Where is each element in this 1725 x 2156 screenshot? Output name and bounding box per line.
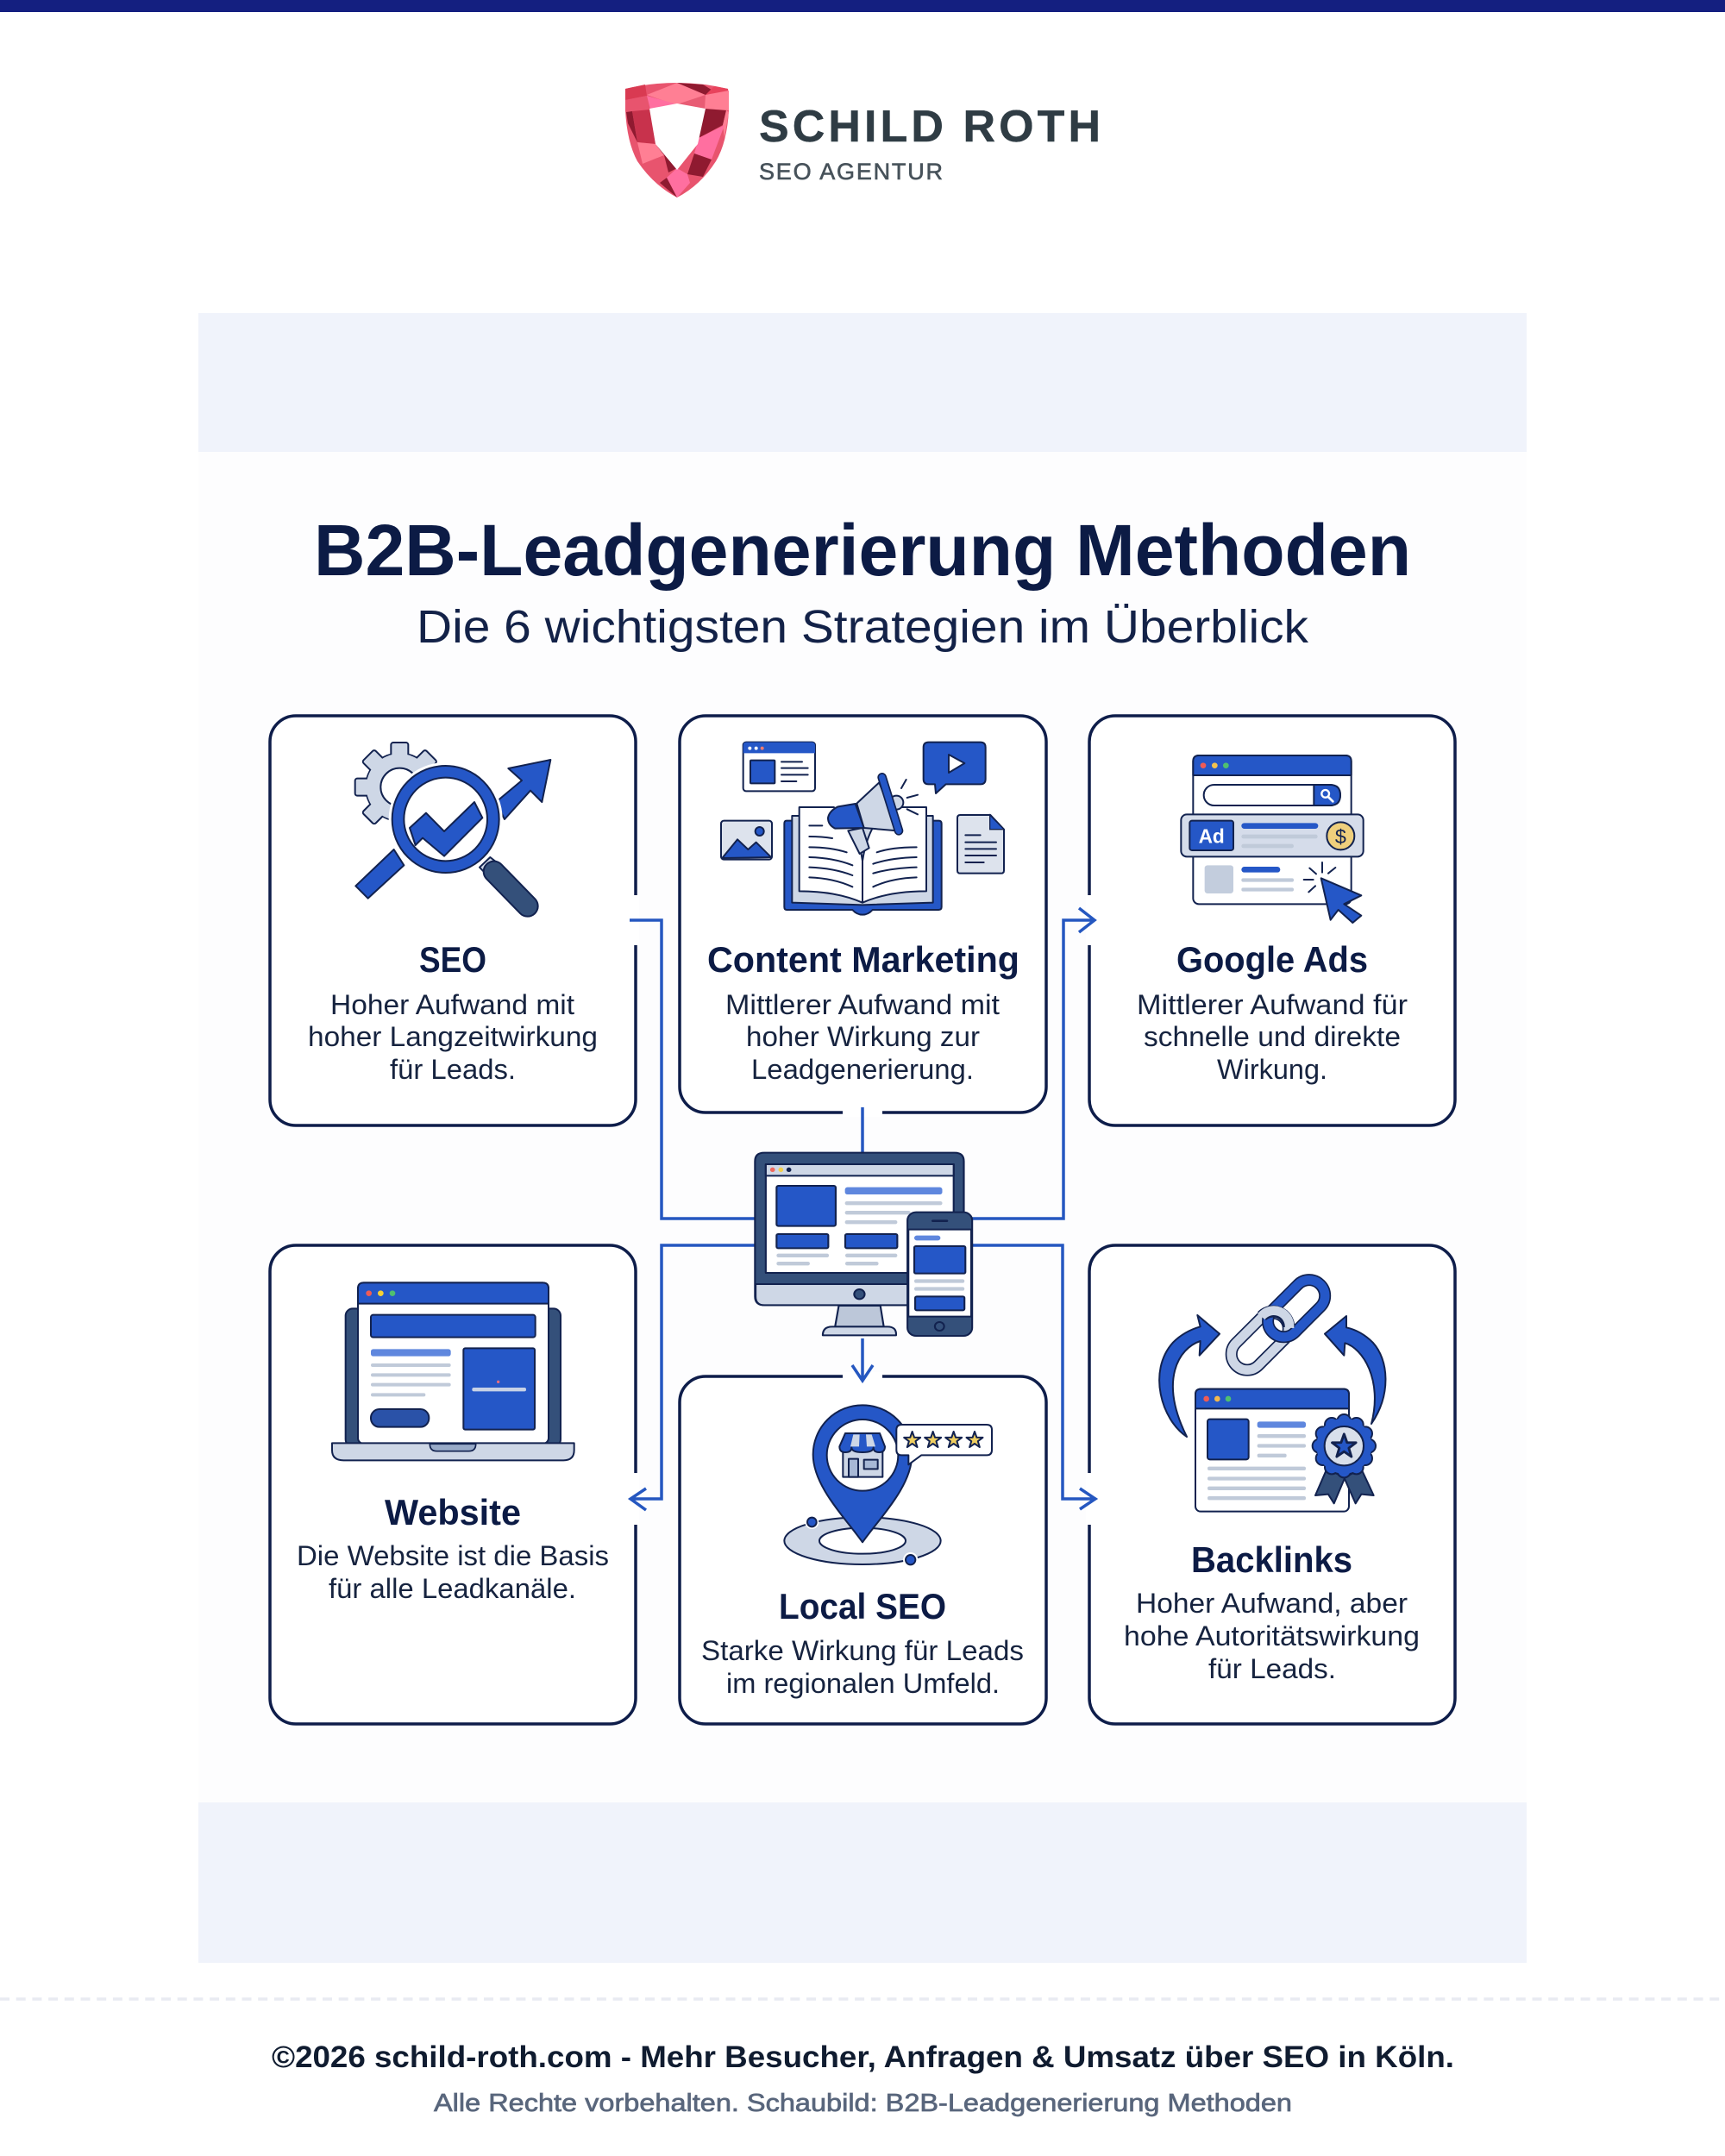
arrow: centre to Local SEO [852, 1338, 873, 1381]
panel: Google Ads [1086, 716, 1455, 1125]
description [701, 1635, 1024, 1699]
arrow: centre to Backlinks [970, 1245, 1095, 1509]
arrow: centre to Google Ads [962, 908, 1095, 1219]
arrow: centre to Website [630, 1245, 756, 1510]
description: Hoher Aufwand, aber [1136, 1588, 1408, 1619]
description: im regionalen Umfeld. [726, 1668, 1000, 1699]
icon: laptop with website [332, 1282, 574, 1460]
panel: Local SEO [680, 1372, 1046, 1724]
description: für alle Leadkanäle. [329, 1573, 576, 1604]
description: Hoher Aufwand mit [330, 989, 574, 1020]
logo: Schild Roth [625, 83, 1101, 197]
panel: Backlinks [1086, 1245, 1455, 1724]
description: für Leads. [390, 1054, 516, 1085]
heading: SEO [419, 939, 486, 980]
panel: Website [270, 1245, 639, 1724]
description: für Leads. [1208, 1653, 1336, 1684]
description [1137, 989, 1408, 1085]
subtitle: Die 6 wichtigsten Strategien im Überblick [417, 601, 1309, 653]
description: hoher Wirkung zur [746, 1021, 980, 1052]
description: Wirkung. [1217, 1054, 1327, 1085]
description: schnelle und direkte [1144, 1021, 1401, 1052]
card frame [680, 1376, 1046, 1724]
description: Die Website ist die Basis [297, 1540, 609, 1571]
description: Mittlerer Aufwand für [1137, 989, 1408, 1020]
card frame [270, 1245, 636, 1724]
description [297, 1540, 609, 1604]
description [1124, 1588, 1420, 1684]
card frame [680, 716, 1046, 1112]
connector: SEO to centre [630, 920, 756, 1219]
heading: Local SEO [779, 1586, 946, 1626]
description: hohe Autoritätswirkung [1124, 1620, 1420, 1651]
description: Starke Wirkung für Leads [701, 1635, 1024, 1666]
footer rights note: Alle Rechte vorbehalten. Schaubild: B2B-Leadgenerierung Methoden [434, 2090, 1292, 2117]
description [308, 989, 598, 1085]
panel: Content Marketing [680, 716, 1046, 1117]
icon: SEO magnifier, gear and arrow [355, 743, 550, 906]
icon: search ad window and cursor: $ [1335, 825, 1346, 848]
panel: SEO [270, 716, 639, 1125]
description [725, 989, 1000, 1085]
title: B2B-Leadgenerierung Methoden [314, 510, 1411, 591]
heading: Google Ads [1176, 939, 1368, 980]
description: hoher Langzeitwirkung [308, 1021, 598, 1052]
icon: book, megaphone and media [721, 743, 1004, 915]
footer copyright: ©2026 schild-roth.com - Mehr Besucher, Anfragen & Umsatz über SEO in Köln. [272, 2040, 1454, 2074]
description: Leadgenerierung. [751, 1054, 974, 1085]
card frame [270, 716, 636, 1125]
footer divider [0, 1997, 1725, 2001]
bottom pale band [198, 1802, 1527, 1963]
icon: map pin with store and stars [784, 1405, 992, 1567]
main panel background [198, 452, 1527, 1802]
connector: Content Marketing to centre [861, 1107, 864, 1156]
tagline: SEO AGENTUR [759, 159, 943, 185]
icon: faceted red shield [625, 83, 729, 197]
icon: chain link, arrows and badge [1159, 1274, 1385, 1512]
card frame [1089, 716, 1455, 1125]
heading: Backlinks [1191, 1539, 1352, 1580]
heading: Website [385, 1492, 521, 1532]
wordmark: SCHILD ROTH [759, 102, 1101, 152]
heading: Content Marketing [707, 939, 1019, 980]
icon: search ad window and cursor: Ad [1199, 824, 1225, 847]
description: Mittlerer Aufwand mit [725, 989, 1000, 1020]
icon: search ad window and cursor [1181, 755, 1364, 923]
top bar [0, 0, 1725, 12]
card frame [1089, 1245, 1455, 1724]
icon: desktop monitor and phone [755, 1153, 972, 1336]
top pale band [198, 313, 1527, 452]
